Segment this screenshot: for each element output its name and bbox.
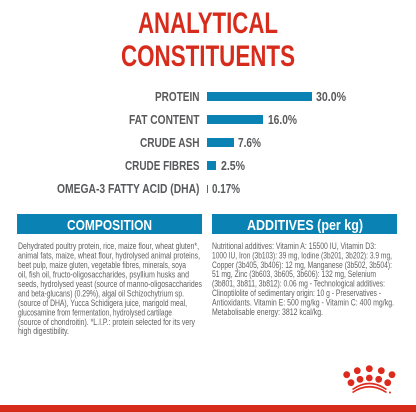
composition text: Dehydrated poultry protein, rice, maize flour, wheat gluten*, (18, 241, 199, 251)
row: omega-3 fatty acid: 0.17% (212, 181, 240, 196)
panel: composition (17, 214, 202, 336)
row: protein: 30.0% (316, 89, 346, 104)
additives heading: ADDITIVES (per kg) (247, 217, 363, 234)
composition text: (source of chondroitin). *L.I.P.: protein selected for its very (18, 317, 195, 327)
composition text: glucosamine from fermentation, hydrolysed cartilage (18, 307, 172, 317)
row: crude ash (140, 135, 261, 150)
row: protein: PROTEIN (155, 89, 200, 104)
bar chart: analytical constituents (57, 89, 346, 196)
composition text: (source of DHA), Yucca Schidigera juice, marigold meal, (18, 298, 187, 308)
additives heading (212, 214, 397, 234)
row: crude fibres: 2.5% (221, 158, 245, 173)
panel: additives (212, 214, 397, 317)
composition text: and beta-glucans) (0.29%), algal oil Schizochytrium sp. (18, 288, 184, 298)
composition text (18, 241, 202, 336)
row: crude fibres: CRUDE FIBRES (125, 158, 200, 173)
footer red bar (0, 405, 416, 412)
additives text: Nutritional additives: Vitamin A: 15500 IU, Vitamin D3: (212, 241, 376, 251)
composition text: oil, fish oil, fructo-oligosaccharides, psyllium husks and (18, 269, 189, 279)
additives text (212, 241, 394, 317)
composition heading: COMPOSITION (67, 217, 152, 234)
row: protein (155, 89, 346, 104)
row: crude ash: 7.6% (238, 135, 261, 150)
title: ANALYTICAL (138, 7, 278, 40)
row: crude ash: CRUDE ASH (140, 135, 200, 150)
row: fat content: FAT CONTENT (129, 112, 200, 127)
composition text: high digestibility. (18, 326, 69, 336)
additives text: Metabolisable energy: 3812 kcal/kg. (212, 307, 323, 317)
composition text: beet pulp, maize gluten, vegetable fibres, minerals, soya (18, 260, 186, 270)
composition text: animal fats, maize, wheat flour, hydrolysed animal proteins, (18, 250, 200, 260)
row: fat content: 16.0% (268, 112, 297, 127)
title: CONSTITUENTS (121, 40, 295, 73)
title (121, 7, 295, 73)
composition text: seeds, hydrolysed yeast (source of manno-oligosaccharides (18, 279, 202, 289)
row: omega-3 fatty acid: OMEGA-3 FATTY ACID (DHA) (57, 181, 200, 196)
row: fat content (129, 112, 297, 127)
icon: royal canin crown logo (343, 365, 395, 394)
composition heading (17, 214, 202, 234)
